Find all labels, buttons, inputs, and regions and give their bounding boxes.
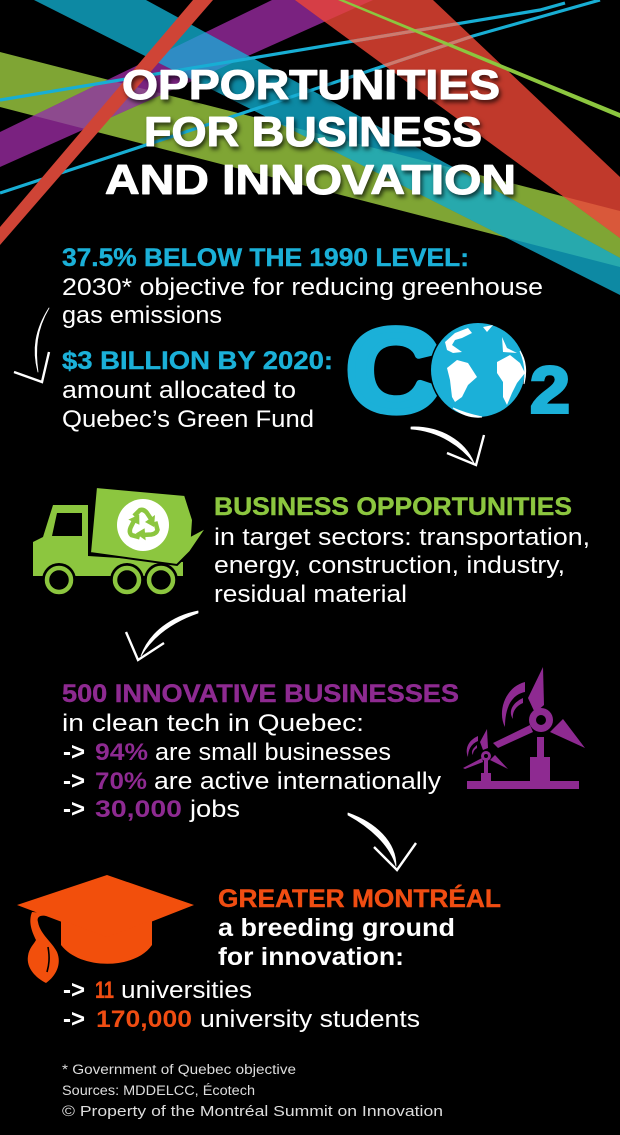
text block: Greater Montreal: 170,000 <box>96 1006 192 1033</box>
text block: Greater Montreal <box>63 884 501 1033</box>
title: OPPORTUNITIES <box>122 61 500 108</box>
arrow: to business opportunities <box>411 427 484 465</box>
text block: Greater Montreal: a breeding ground <box>218 914 455 942</box>
text block: Greater Montreal: -> <box>63 976 85 1004</box>
arrow: to Greater Montreal <box>348 813 416 870</box>
text block: innovative businesses: are active internationally <box>154 768 441 795</box>
text block: innovative businesses: jobs <box>189 796 240 823</box>
text block: Greater Montreal: GREATER MONTRÉAL <box>218 884 501 913</box>
text block: green fund: amount allocated to <box>62 377 296 404</box>
text block: Greater Montreal: for innovation: <box>218 943 404 971</box>
icon: CO2 with globe <box>346 305 570 437</box>
text block: innovative businesses: 70% <box>95 768 147 795</box>
recycling symbol <box>124 510 161 543</box>
text block: emissions objective: 2030* objective for reducing greenhouse <box>62 274 543 301</box>
text block: innovative businesses: -> <box>63 795 85 823</box>
text block: innovative businesses: 30,000 <box>95 796 182 823</box>
icon: CO2 with globe: C <box>346 305 440 437</box>
text block: innovative businesses: in clean tech in Quebec: <box>62 710 364 737</box>
footnotes and sources: * Government of Quebec objective <box>62 1062 296 1077</box>
text block: innovative businesses: 500 INNOVATIVE BUSINESSES <box>62 680 459 708</box>
decorative ribbon banner <box>0 0 620 295</box>
footnotes and sources: Sources: MDDELCC, Écotech <box>62 1083 255 1098</box>
icon: graduation cap <box>17 875 194 983</box>
text block: innovative businesses: are small businesses <box>155 739 391 766</box>
text block: emissions objective: 37.5% BELOW THE 1990 LEVEL: <box>62 244 469 272</box>
text block: business opportunities: BUSINESS OPPORTUNITIES <box>214 493 572 521</box>
text block: green fund <box>62 347 333 433</box>
text block: business opportunities: energy, construction, industry, <box>214 552 565 579</box>
text block: business opportunities: in target sectors: transportation, <box>214 524 590 551</box>
text block: emissions objective: gas emissions <box>62 302 222 329</box>
arrow: to innovative businesses <box>126 611 198 660</box>
title: FOR BUSINESS <box>144 108 482 155</box>
title <box>105 61 516 203</box>
text block: innovative businesses <box>62 680 459 823</box>
text block: business opportunities <box>214 493 590 608</box>
footnotes and sources <box>62 1062 443 1120</box>
text block: green fund: $3 BILLION BY 2020: <box>62 347 333 375</box>
text block: innovative businesses: -> <box>63 767 85 795</box>
footnotes and sources: © Property of the Montréal Summit on Innovation <box>62 1103 443 1120</box>
text block: Greater Montreal: -> <box>63 1005 85 1033</box>
text block: green fund: Quebec’s Green Fund <box>62 406 314 433</box>
text block: emissions objective <box>62 244 543 329</box>
text block: Greater Montreal: universities <box>121 977 252 1004</box>
text block: innovative businesses: -> <box>63 738 85 766</box>
text block: innovative businesses: 94% <box>95 739 148 766</box>
globe continents <box>445 325 526 417</box>
text block: business opportunities: residual material <box>214 581 407 608</box>
icon: CO2 with globe: 2 <box>530 352 570 426</box>
arrow: to green fund <box>14 308 49 382</box>
icon: recycling truck <box>33 487 207 597</box>
text block: Greater Montreal: university students <box>200 1006 420 1033</box>
title: AND INNOVATION <box>105 156 516 203</box>
text block: Greater Montreal: 11 <box>95 977 114 1004</box>
icon: wind turbines <box>463 667 585 789</box>
